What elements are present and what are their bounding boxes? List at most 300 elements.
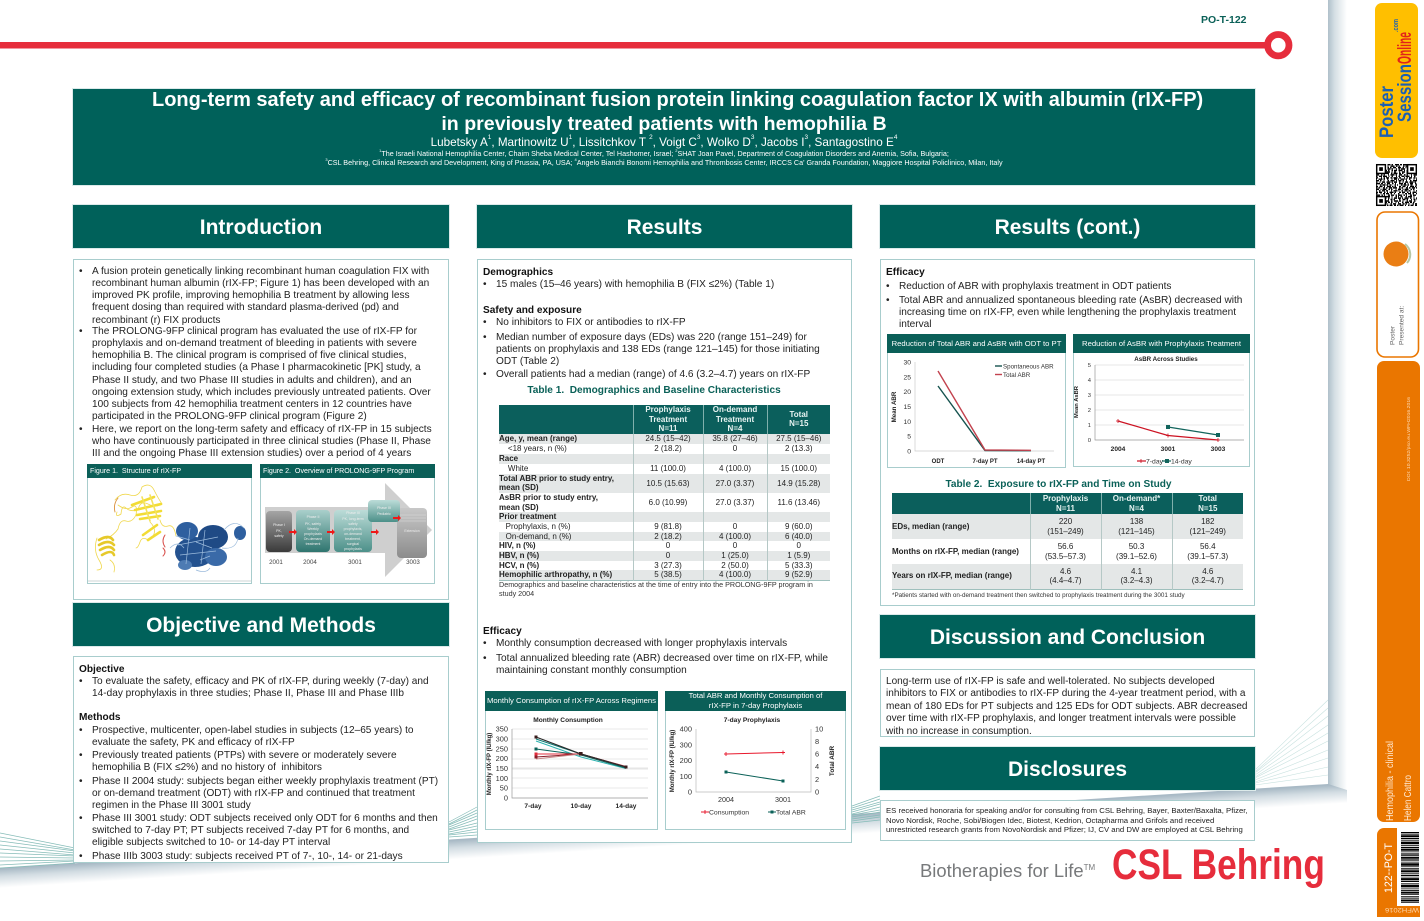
heading: Results (cont.): Results (cont.) [995, 216, 1140, 239]
line chart: 7-day prophylaxis: 6 [815, 750, 819, 758]
line chart: mean ABR: 7-day PT [972, 459, 998, 465]
table 1: demographics: 9 (52.9) [785, 570, 813, 579]
table 1: demographics: 5 (38.5) [654, 570, 682, 579]
line chart: 7-day prophylaxis: 10 [815, 724, 823, 734]
table 1: demographics: Prophylaxis, n (%) [506, 522, 571, 531]
efficacy text: increasing time on rIX-FP, even while lengthening the prophylaxis treatment [899, 307, 1236, 318]
table 2: exposure: (53.5–57.3) [1045, 552, 1086, 560]
figure 1 heading: Figure 1. Structure of rIX-FP [90, 467, 181, 475]
table 2: exposure: On-demand* [1113, 494, 1160, 503]
table 2: exposure: 50.3 [1129, 542, 1144, 551]
line chart: 7-day prophylaxis: 0 [688, 788, 692, 796]
sidebar: presented at box [1376, 211, 1420, 358]
chart heading: Reduction of Total ABR and AsBR with ODT to PT [892, 339, 1061, 348]
table 2 footnote: *Patients started with on-demand treatment then switched to prophylaxis treatment during the 3001 study [892, 592, 1185, 599]
table 1: demographics: HBV, n (%) [499, 551, 539, 560]
program timeline diagram: treatment, [345, 537, 361, 541]
methods text: • [79, 776, 83, 787]
line chart: monthly consumption: 10-day [571, 803, 592, 810]
table 1: demographics: 0 [733, 444, 737, 453]
table 1: demographics: 9 (60.0) [785, 522, 813, 531]
line chart: monthly consumption: 300 [496, 734, 508, 744]
demographics text: 15 males (15–46 years) with hemophilia B (FIX ≤2%) (Table 1) [496, 279, 774, 290]
line chart: AsBR across studies: 5 [1088, 363, 1091, 369]
efficacy text: maintaining constant monthly consumption [496, 665, 687, 676]
objective text [79, 664, 429, 699]
table 1: demographics: mean (SD) [499, 503, 539, 512]
table 2: exposure: N=15 [1198, 504, 1217, 512]
line chart: monthly consumption [486, 717, 648, 810]
line chart: 7-day prophylaxis: 4 [815, 762, 819, 771]
program timeline diagram: treatment [306, 542, 320, 546]
line chart: AsBR across studies: 4 [1088, 378, 1092, 384]
line chart: monthly consumption: 14-day [616, 803, 637, 810]
table 2: exposure: 138 [1130, 517, 1143, 526]
methods text: • [79, 851, 83, 862]
table 2: exposure: (3.2–4.3) [1120, 576, 1153, 585]
sidebar: orange info bar: Helen Cattro [1402, 775, 1414, 821]
program timeline diagram: Pediatric [377, 512, 391, 516]
safety and exposure text: • [483, 369, 487, 380]
introduction bullets: participated in the PROLONG-9FP clinical program (Figure 2) [92, 411, 367, 422]
table 1: demographics: AsBR prior to study entry, [499, 493, 598, 502]
demographics text [483, 267, 774, 290]
demographics text: • [483, 279, 487, 290]
methods text: Previously treated patients (PTPs) with severe or moderately severe [92, 750, 397, 761]
line chart: mean ABR: 14-day PT [1017, 459, 1046, 465]
table 2: exposure: (39.1–52.6) [1116, 552, 1157, 560]
affiliations [325, 148, 1003, 167]
efficacy text: • [886, 295, 890, 306]
figure 2 heading [260, 464, 435, 478]
methods text: eligible subjects switched to 10- or 14-day PT interval [92, 837, 330, 848]
table 1: demographics [499, 405, 830, 581]
table 2: exposure: Prophylaxis [1043, 494, 1088, 503]
table 2: exposure: (3.2–4.7) [1192, 576, 1224, 585]
introduction bullets: prophylaxis and on-demand treatment of bleeding in patients with severe [92, 338, 417, 349]
line chart: AsBR across studies: AsBR Across Studies [1134, 356, 1198, 363]
table 1 title: Table 1. Demographics and Baseline Characteristics [527, 385, 781, 396]
program timeline diagram: PK, long-term [342, 517, 364, 521]
protein structure illustration [88, 484, 252, 582]
efficacy text [483, 626, 828, 676]
line chart: 7-day prophylaxis: 0 [815, 788, 819, 796]
line chart: AsBR across studies: 3 [1088, 393, 1091, 399]
table 1: demographics: N=4 [728, 424, 742, 433]
line chart: 7-day prophylaxis: 100 [680, 772, 692, 781]
title banner [73, 89, 1255, 185]
table 1: demographics: 0 [797, 541, 801, 550]
efficacy text: Total annualized bleeding rate (ABR) decreased over time on rIX-FP, while [496, 653, 828, 664]
table 1: demographics: 0 [733, 522, 737, 531]
line chart: monthly consumption: 100 [496, 774, 508, 783]
table 2: exposure: N=4 [1129, 504, 1144, 512]
table 1 footnote: Demographics and baseline characteristics at the time of entry into the PROLONG-9FP program in [499, 580, 813, 589]
chart heading [665, 691, 846, 711]
heading: Objective and Methods: Objective and Methods [146, 614, 376, 637]
objective text: 14-day prophylaxis in three studies; Phase II, Phase III and Phase IIIb [92, 688, 404, 699]
table 1 footnote [499, 580, 813, 598]
methods text: Phase III 3001 study: ODT subjects received only ODT for 6 months and then [92, 813, 438, 824]
program timeline diagram: Phase I [273, 523, 285, 527]
efficacy text: Monthly consumption decreased with longer prophylaxis intervals [496, 638, 787, 649]
table 1: demographics: N=11 [659, 424, 677, 433]
line chart: monthly consumption: Monthly Consumption [533, 717, 603, 724]
heading: Discussion and Conclusion: Discussion and Conclusion [930, 626, 1205, 649]
table 2: exposure: 4.6 [1202, 567, 1213, 576]
line chart: AsBR across studies: 14-day [1171, 458, 1192, 466]
program timeline diagram: prophylaxis [304, 532, 322, 536]
introduction bullets: Phase II study, and two Phase III studies in adults and children), and an [92, 375, 412, 386]
table 1: demographics: On-demand, n (%) [506, 532, 571, 541]
line chart: AsBR across studies: 3001 [1161, 446, 1176, 453]
efficacy text: Efficacy [886, 267, 925, 278]
line chart: AsBR across studies: 3003 [1211, 446, 1226, 453]
table 2: exposure: (121–249) [1190, 526, 1226, 536]
sidebar: poster code and barcode: WFH2016 [1385, 906, 1419, 913]
table 1: demographics: N=15 [789, 419, 808, 428]
chart panel: reduction of AsBR [1073, 334, 1250, 467]
line chart: monthly consumption: Monthly rIX-FP (IU/kg) [487, 733, 493, 795]
panel: results [477, 259, 852, 843]
chart heading: Total ABR and Monthly Consumption of [689, 691, 822, 700]
affiliations: 1The Israeli National Hemophilia Center, Chaim Sheba Medical Center, Tel Hashomer, Israel; 2SHAT Joan Pavel, Department of Coagulation Disorders and Anemia, Sofia, Bulgaria; [379, 148, 949, 158]
table 2: exposure: 182 [1201, 517, 1214, 526]
figure 1: structure of rIX-FP [87, 464, 252, 584]
introduction bullets: improved PK profile, improving hemophilia B treatment by allowing less [92, 290, 410, 301]
figure 2: overview of program [260, 464, 435, 584]
table 1: demographics: 2 (50.0) [721, 561, 749, 570]
table 1: demographics: Treatment [716, 415, 754, 424]
safety and exposure text: • [483, 317, 487, 328]
safety and exposure text: Safety and exposure [483, 305, 582, 316]
chart heading: Monthly Consumption of rIX-FP Across Regimens [487, 696, 656, 705]
table 1: demographics: 4 (100.0) [719, 570, 751, 579]
logo: CSL Behring: CSL Behring [1112, 841, 1325, 889]
table 1: demographics: 14.9 (15.28) [777, 479, 820, 488]
line chart: mean ABR: Total ABR [1003, 372, 1031, 379]
line chart: 7-day prophylaxis [670, 717, 836, 816]
program timeline diagram: Extension [404, 529, 420, 533]
methods text: Prospective, multicenter, open-label studies in subjects (12–65 years) to [92, 725, 414, 736]
line chart: monthly consumption: 200 [496, 754, 508, 763]
table 1: demographics: Prior treatment [499, 512, 556, 521]
efficacy text: • [483, 638, 487, 649]
table 1: demographics: On-demand [713, 405, 757, 414]
title [152, 89, 1203, 135]
line chart: mean ABR: 25 [903, 374, 911, 382]
table 1: demographics: 0 [666, 551, 670, 560]
safety and exposure text: • [483, 332, 487, 343]
methods text: Methods [79, 712, 120, 723]
methods text: • [79, 813, 83, 824]
program timeline diagram: 2001 [269, 559, 283, 566]
line chart: mean ABR: 5 [907, 434, 911, 440]
efficacy text [886, 267, 1242, 330]
table 1: demographics: Total ABR prior to study entry, [499, 474, 614, 483]
safety and exposure text [483, 305, 820, 380]
chart heading [887, 334, 1066, 353]
table 1: demographics: 35.8 (27–46) [712, 434, 758, 443]
line chart: 7-day prophylaxis: 300 [680, 740, 692, 750]
line chart: monthly consumption: 0 [504, 794, 508, 802]
chart heading: Reduction of AsBR with Prophylaxis Treatment [1082, 339, 1241, 348]
methods text: • [79, 725, 83, 736]
program timeline diagram: Weekly [307, 527, 319, 531]
efficacy text: Efficacy [483, 626, 522, 637]
line chart: 7-day prophylaxis: Total ABR [776, 810, 806, 816]
line chart: 7-day prophylaxis: 400 [680, 724, 692, 734]
table 2: exposure: (39.1–57.3) [1187, 552, 1228, 560]
introduction bullets: • [79, 266, 83, 277]
objective text: Objective [79, 664, 124, 675]
line chart: AsBR across studies: Mean AsBR [1074, 385, 1080, 418]
conclusion paragraph: with no increase in consumption. [886, 726, 1032, 737]
sidebar: poster code and barcode: 122--PO-T [1383, 843, 1395, 893]
objective text: • [79, 676, 83, 687]
table 2: exposure: (121–145) [1118, 526, 1155, 536]
line chart: AsBR across studies: 7-day [1146, 458, 1164, 466]
line chart: mean ABR: 0 [907, 448, 911, 456]
efficacy text: • [886, 281, 890, 292]
program timeline diagram: PK, safety [305, 522, 321, 526]
chart panel: reduction of total ABR and AsBR [887, 334, 1066, 468]
table 1: demographics: mean (SD) [499, 483, 539, 492]
table 2: exposure: 56.4 [1200, 542, 1216, 551]
table 1: demographics: White [508, 464, 528, 473]
chart panel: monthly consumption across regimens [485, 691, 658, 830]
efficacy text: Reduction of ABR with prophylaxis treatment in ODT patients [899, 281, 1171, 292]
table 1: demographics: 5 (33.3) [785, 561, 813, 570]
title: Long-term safety and efficacy of recombinant fusion protein linking coagulation factor IX with albumin (rIX-FP) [152, 89, 1203, 111]
figure 2 heading: Figure 2. Overview of PROLONG-9FP Program [263, 467, 414, 475]
table 1: demographics: Hemophilic arthropathy, n (%) [499, 570, 612, 579]
line chart: 7-day prophylaxis: 2 [815, 775, 819, 784]
heading: Introduction: Introduction [200, 216, 322, 239]
introduction bullets: A fusion protein genetically linking recombinant human coagulation FIX with [92, 266, 429, 277]
line chart: 7-day prophylaxis: Total ABR [829, 746, 836, 776]
table 2: exposure: Total [1198, 494, 1217, 503]
methods text: • [79, 750, 83, 761]
program timeline diagram: prophylaxis [344, 547, 362, 551]
safety and exposure text: ODT (Table 2) [496, 356, 559, 367]
chart panel: total ABR and consumption [665, 691, 846, 830]
line chart: monthly consumption: 50 [500, 784, 508, 792]
table 2: exposure: (151–249) [1047, 526, 1084, 536]
table 2 title: Table 2. Exposure to rIX-FP and Time on Study [945, 479, 1172, 490]
line chart: 7-day prophylaxis: Monthly rIX-FP (IU/kg) [670, 730, 676, 792]
chart heading: rIX-FP in 7-day Prophylaxis [709, 701, 802, 710]
heading: Objective and Methods [73, 603, 449, 646]
methods text: or on-demand treatment (ODT) with rIX-FP and continued that treatment [92, 788, 415, 799]
table 1: demographics: Age, y, mean (range) [499, 434, 577, 443]
line chart: mean ABR: Spontaneous ABR [1003, 364, 1054, 370]
introduction bullets: • [79, 326, 83, 337]
line chart: 7-day prophylaxis: 8 [815, 737, 819, 746]
objective text: To evaluate the safety, efficacy and PK of rIX-FP, during weekly (7-day) and [92, 676, 429, 687]
line chart: AsBR across studies: 1 [1088, 423, 1091, 429]
red header line with ring [0, 31, 1292, 60]
table 1: demographics: 4 (100.0) [719, 464, 751, 473]
disclosures paragraph: ES received honoraria for speaking and/or for consulting from CSL Behring, Bayer, Baxter/Baxalta, Pfizer, [886, 806, 1248, 815]
table 2: exposure: N=11 [1056, 504, 1075, 512]
title: in previously treated patients with hemophilia B [441, 113, 887, 135]
figure 1 heading [87, 464, 252, 478]
line chart: mean ABR: 10 [903, 419, 911, 426]
chart heading [1073, 334, 1250, 353]
table 1: demographics: 1 (25.0) [721, 551, 749, 560]
introduction bullets: 100 subjects from 42 hemophilia treatment centers in 12 countries have [92, 399, 412, 410]
introduction bullets: including four completed studies (a Phase I pharmacokinetic [PK] study, a [92, 362, 421, 373]
table 1: demographics: 2 (18.2) [654, 444, 682, 453]
table 1: demographics: 10.5 (15.63) [646, 479, 690, 488]
methods text: switched to 7-day PT; PT subjects received 7-day PT for 6 months, and [92, 825, 409, 836]
table 1: demographics: 24.5 (15–42) [645, 434, 691, 443]
table 2: exposure: Months on rIX-FP, median (range) [892, 547, 1019, 556]
methods text: evaluate the safety, PK and efficacy of rIX-FP [92, 737, 295, 748]
heading: Results [477, 205, 852, 248]
conclusion paragraph: inhibitors to FIX or antibodies to rIX-FP during the 4-year treatment period, with a [886, 688, 1245, 699]
sidebar: PosterSessionOnline logo [1375, 3, 1418, 158]
table 1: demographics: 27.5 (15–46) [776, 434, 821, 443]
affiliations: 3CSL Behring, Clinical Research and Development, King of Prussia, PA, USA; 4Angelo Bianchi Bonomi Hemophilia and Thrombosis Center, IRCCS Ca' Granda Foundation, Maggiore Hospital Policlinico, Milan, Italy [325, 157, 1003, 167]
introduction bullets: hemophilia B. The clinical program is comprised of five clinical studies, [92, 350, 407, 361]
table 1: demographics: 9 (81.8) [654, 522, 682, 531]
table 2: exposure: EDs, median (range) [892, 522, 969, 531]
sidebar: PosterSessionOnline logo: Poster [1377, 85, 1398, 138]
table 1: demographics: 11.6 (13.46) [777, 498, 820, 507]
table 1: demographics: <18 years, n (%) [508, 444, 567, 453]
table 1: demographics: 11 (100.0) [650, 464, 686, 473]
table 1: demographics: 0 [733, 541, 737, 550]
program timeline diagram: Phase III [346, 511, 360, 515]
table 1: demographics: 1 (5.9) [787, 551, 810, 560]
heading: Introduction [73, 205, 449, 248]
panel: objective and methods [73, 656, 449, 863]
introduction bullets: ongoing extension study, which includes previously untreated patients. Over [92, 387, 431, 398]
table 2: exposure: 4.1 [1131, 567, 1142, 576]
demographics text: Demographics [483, 267, 553, 278]
disclosures paragraph [886, 806, 1248, 834]
line chart: AsBR across studies: 2004 [1111, 446, 1126, 453]
heading: Results (cont.) [880, 205, 1255, 248]
line chart: monthly consumption: 7-day [524, 803, 542, 810]
methods text [79, 712, 438, 862]
program timeline diagram: Phase II [307, 515, 319, 519]
program timeline diagram [265, 483, 432, 577]
safety and exposure text: No inhibitors to FIX or antibodies to rIX-FP [496, 317, 686, 328]
program timeline diagram: 3001 [348, 559, 362, 566]
efficacy text: Total ABR and annualized spontaneous bleeding rate (AsBR) decreased with [899, 295, 1242, 306]
sidebar: orange info bar: DOI: 10.3252/pso.eu.WFH2016.2016 [1406, 397, 1411, 481]
program timeline diagram: Phase III [377, 506, 391, 510]
table 1: demographics: HIV, n (%) [499, 541, 536, 550]
table 2: exposure: 4.6 [1060, 567, 1071, 576]
line chart: 7-day prophylaxis: Consumption [709, 810, 749, 816]
table 1: demographics: 3 (27.3) [654, 561, 682, 570]
safety and exposure text: patients on prophylaxis and 138 EDs (range 121–145) for those initiating [496, 344, 820, 355]
sidebar: PosterSessionOnline logo: Online [1395, 32, 1416, 64]
safety and exposure text: Overall patients had a median (range) of 4.6 (3.2–4.7) years on rIX-FP [496, 369, 810, 380]
table 1: demographics: Treatment [649, 415, 687, 424]
line chart: mean ABR: ODT [932, 459, 945, 465]
line chart: monthly consumption: 150 [496, 764, 508, 773]
sidebar: PosterSessionOnline logo: .com [1393, 19, 1400, 32]
panel: disclosures text [880, 800, 1255, 841]
disclosures paragraph: Novo Nordisk, Roche, Sobi/Biogen Idec, Biotest, Kedrion, Octapharma and Grifols and received [886, 816, 1214, 824]
program timeline diagram: 3003 [406, 559, 420, 566]
program timeline diagram: safety [274, 534, 284, 538]
introduction bullets [79, 266, 432, 459]
table 2: exposure: 220 [1059, 517, 1072, 526]
table 1: demographics: Prophylaxis [645, 405, 691, 414]
table 1: demographics: 6.0 (10.99) [649, 498, 687, 507]
heading: Disclosures [880, 747, 1255, 790]
conclusion paragraph [886, 676, 1248, 737]
efficacy text: • [483, 653, 487, 664]
line chart: 7-day prophylaxis: 2004 [718, 795, 734, 804]
line chart: monthly consumption: 250 [496, 744, 508, 754]
disclosures paragraph: unrestricted research grants from NovoNordisk and Pfizer; IJ, CV and DW are employed at CSL Behring [886, 825, 1243, 834]
table 1: demographics: Race [499, 454, 518, 463]
introduction bullets: recombinant (r) FIX products [92, 315, 220, 326]
heading: Disclosures: Disclosures [1008, 758, 1127, 781]
logo: Biotherapies for Life tagline: Biotherapies for LifeTM [920, 860, 1095, 881]
program timeline diagram: safety [348, 522, 358, 526]
sidebar: presented at box: Presented at: [1398, 306, 1406, 345]
table 1 footnote: study 2004 [499, 589, 534, 598]
introduction bullets: Here, we report on the long-term safety and efficacy of rIX-FP in 15 subjects [92, 424, 432, 435]
line chart: mean ABR [891, 360, 1054, 465]
introduction bullets: recombinant human albumin (rIX-FP; Figure 1) has been developed with an [92, 278, 429, 289]
line chart: 7-day prophylaxis: 200 [680, 756, 692, 765]
efficacy text: interval [899, 319, 932, 330]
methods text: regimen in the Phase III 3001 study [92, 800, 251, 811]
table 1: demographics: 15 (100.0) [781, 464, 817, 473]
panel: discussion text [880, 669, 1255, 737]
line chart: mean ABR: 20 [903, 389, 911, 396]
line chart: 7-day prophylaxis: 7-day Prophylaxis [724, 717, 781, 724]
table 1: demographics: 27.0 (3.37) [716, 479, 754, 488]
introduction bullets: The PROLONG-9FP clinical program has evaluated the use of rIX-FP for [92, 326, 417, 337]
conclusion paragraph: over time with rIX-FP prophylaxis, and longer treatment intervals were possible [886, 713, 1236, 724]
methods text: hemophilia B (FIX ≤2%) and no history of inhibitors [92, 762, 322, 773]
table 2: exposure: (4.4–4.7) [1049, 576, 1082, 585]
line chart: mean ABR: 30 [903, 360, 911, 366]
methods text: Phase II 2004 study: subjects began either weekly prophylaxis treatment (PT) [92, 776, 438, 787]
table 2: exposure [892, 493, 1243, 590]
poster number: PO-T-122 [1201, 14, 1247, 26]
authors: Lubetsky A1, Martinowitz U1, Lissitchkov T 2, Voigt C3, Wolko D3, Jacobs I3, Santagostino E4 [431, 134, 897, 149]
methods text: Phase IIIb 3003 study: subjects received PT of 7-, 10-, 14- or 21-days [92, 851, 403, 862]
introduction bullets: who have continuously participated in three clinical studies (Phase II, Phase [92, 436, 431, 447]
safety and exposure text: Median number of exposure days (EDs) was 220 (range 151–249) for [496, 332, 807, 343]
table 1: demographics: HCV, n (%) [499, 561, 539, 570]
line chart: mean ABR: Mean ABR [891, 391, 898, 422]
line chart: 7-day prophylaxis: 3001 [775, 795, 791, 804]
program timeline diagram: PK, [276, 529, 282, 533]
program timeline diagram: prophylaxis, [344, 527, 362, 531]
line chart: AsBR across studies: 0 [1088, 438, 1091, 444]
program timeline diagram: surgical [347, 542, 359, 546]
table 2: exposure: 56.6 [1058, 542, 1073, 551]
conclusion paragraph: mean of 180 EDs for PT subjects and 125 EDs for ODT subjects. ABR decreased [886, 701, 1248, 712]
program timeline diagram: On-demand [304, 537, 322, 541]
table 1: demographics: 2 (13.3) [785, 444, 813, 453]
table 1: demographics: 27.0 (3.37) [716, 498, 754, 507]
conclusion paragraph: Long-term use of rIX-FP is safe and well-tolerated. No subjects developed [886, 676, 1215, 687]
table 1: demographics: 6 (40.0) [785, 532, 813, 541]
